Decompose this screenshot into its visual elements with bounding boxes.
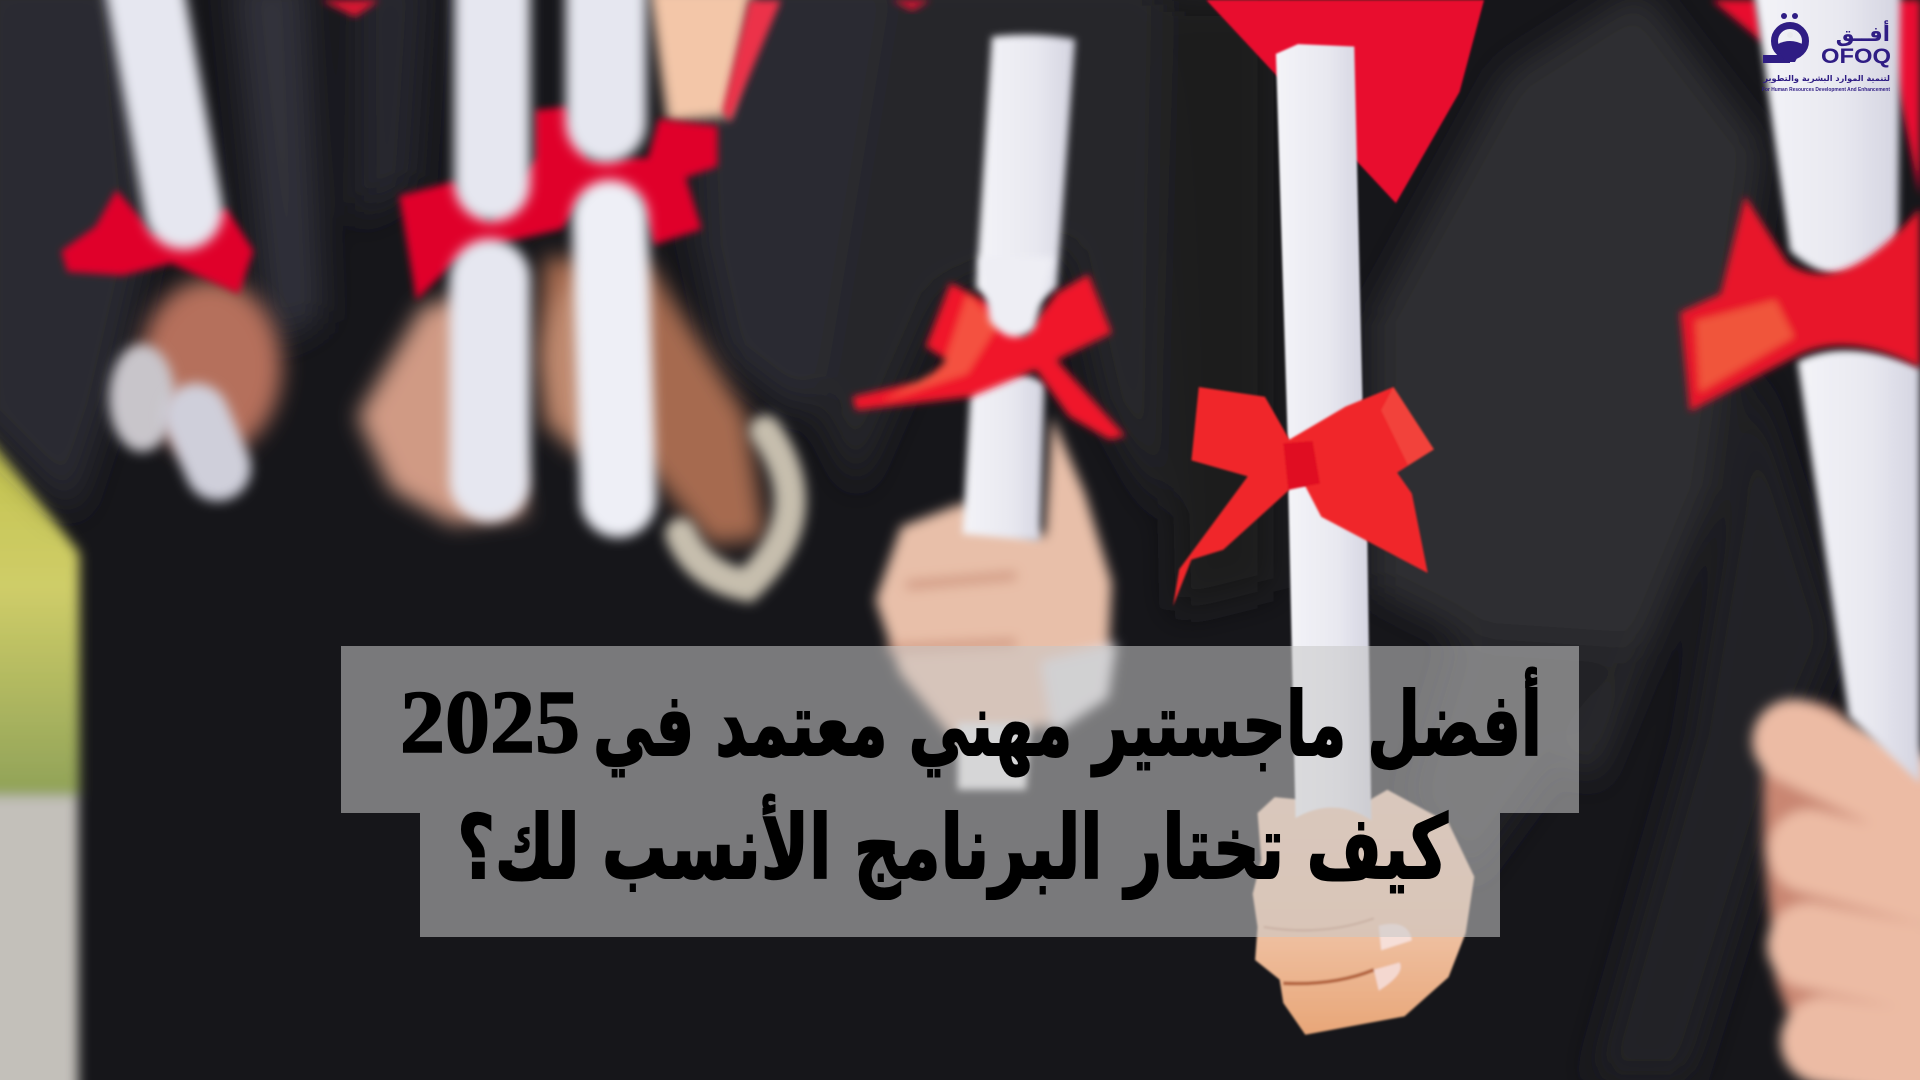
logo arabic tagline: لتنمية الموارد البشرية والتطوير <box>1762 73 1890 84</box>
far hands <box>140 257 765 545</box>
title line 2: كيف تختار البرنامج الأنسب لك؟ <box>457 796 1448 899</box>
logo: OFOQ <box>1762 13 1891 93</box>
middle diploma knot cover <box>980 257 1053 337</box>
front diploma <box>1276 44 1371 820</box>
peach background top centre <box>649 0 753 122</box>
right hand <box>1763 700 1920 1080</box>
far red ribbons <box>61 107 718 300</box>
left green background <box>0 416 80 1080</box>
title line 1: 2025 <box>400 673 580 772</box>
middle red bow <box>852 274 1125 440</box>
logo arabic name: أفــق <box>1836 19 1890 46</box>
title line 1: أفضل ماجستير مهني معتمد في <box>593 673 1542 776</box>
title panel lower band <box>420 813 1500 937</box>
front hand <box>1253 790 1474 1035</box>
far sleeve cuffs <box>109 344 790 585</box>
logo latin name: OFOQ <box>1821 45 1891 68</box>
title panel upper band <box>341 646 1579 813</box>
far diplomas <box>142 0 618 500</box>
logo icon <box>1763 13 1806 63</box>
right diploma <box>1753 0 1920 784</box>
red collars <box>321 0 1920 203</box>
middle hand <box>876 416 1117 741</box>
logo english tagline: For Human Resources Development And Enhancement <box>1762 87 1890 93</box>
middle diploma <box>958 35 1075 790</box>
right red bow <box>1680 196 1920 411</box>
front red bow <box>1173 387 1434 606</box>
